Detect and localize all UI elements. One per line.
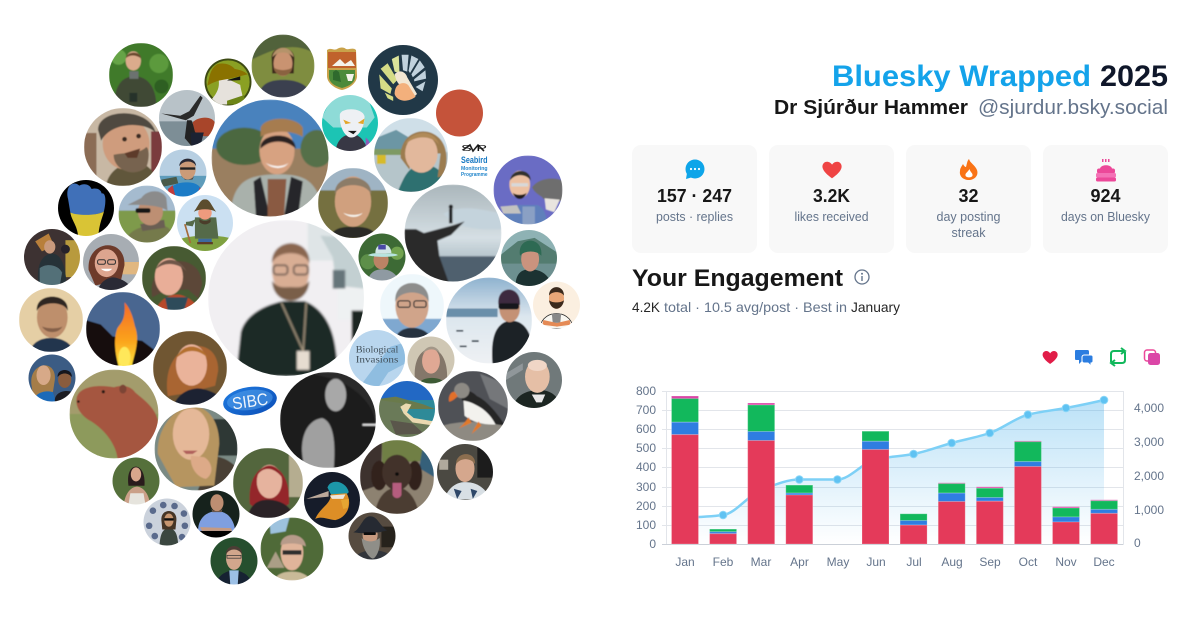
avatar: man in sunglasses on snowy shore: [446, 278, 532, 364]
avatar: woman with glasses and red hair: [83, 234, 139, 290]
avatar: Seabird Monitoring Programme logo: S P: [461, 144, 487, 153]
avatar: blonde woman finger to lip: [154, 406, 238, 490]
panel: days on Bluesky: [1043, 145, 1168, 253]
avatar: Seabird Monitoring Programme logo: Monitoring: [461, 166, 488, 172]
avatar: woman with long grey hair: [408, 336, 454, 384]
month labels: May: [827, 555, 849, 569]
avatar: SIBC logo: SIBC: [231, 390, 269, 413]
avatar: Biological Invasions journal: [349, 330, 405, 386]
icon: chat bubble: [686, 160, 704, 179]
month labels: Nov: [1055, 555, 1077, 569]
icon: replies: [1075, 350, 1093, 366]
bars: Apr: [786, 485, 813, 544]
avatar: person with mask and yellow wall: [24, 229, 80, 285]
avatar: shield logo: [327, 48, 357, 90]
panel: days on Bluesky: days on Bluesky: [1061, 209, 1150, 224]
avatar: woman against patterned wall: [144, 498, 190, 546]
panel: likes received: 3.2K: [813, 186, 850, 206]
cumulative line: [685, 400, 1104, 518]
avatar: woman in green beanie: [501, 230, 557, 286]
avatar: man with glasses: [380, 274, 444, 338]
avatar: man in beanie closeup: [84, 108, 162, 188]
bars: Feb: [710, 529, 737, 544]
avatar: capybara: [70, 370, 158, 458]
bars: Nov: [1052, 507, 1080, 544]
avatar: SIBC logo: [221, 383, 279, 419]
month labels: Feb: [713, 555, 734, 569]
engagement summary: [632, 299, 900, 315]
bars: Oct: [1014, 441, 1041, 544]
left axis labels: 0: [649, 537, 656, 551]
avatar: two friends selfie: [28, 354, 75, 402]
cumulative area: [685, 400, 1104, 544]
month labels: Jul: [906, 555, 922, 569]
avatar: man with blue jacket: [160, 150, 206, 196]
bars: Mar: [748, 403, 775, 544]
panel: day posting streak: 32: [958, 186, 978, 206]
left axis labels: 700: [636, 403, 656, 417]
avatar: man in green foliage: [109, 43, 173, 107]
avatar: man in blue shirt: [192, 490, 240, 538]
panel: day posting streak: streak: [952, 225, 986, 240]
avatar: bird of prey over sea: [159, 90, 215, 146]
right axis labels: [1134, 401, 1164, 550]
avatar: cartoon hiker: [177, 195, 233, 251]
avatar: teal anime character: [322, 95, 378, 151]
avatar: bonfire at dusk: [86, 292, 160, 367]
avatar: bearded man in wide hat: [348, 512, 396, 560]
chart legend icons: [1043, 348, 1160, 366]
avatar: smiling man with cap in landscape: [212, 100, 333, 219]
bars: Jun: [862, 431, 889, 544]
avatar: blonde woman by lake: [374, 118, 448, 196]
month labels: Mar: [751, 555, 771, 569]
avatar: Biological Invasions journal: Biological: [356, 345, 399, 355]
avatar: Ukraine fist: [58, 180, 114, 236]
avatar: bearded man outdoors: [252, 34, 314, 98]
gridlines: [662, 391, 1124, 544]
avatar: woman in cap: [358, 234, 406, 280]
profile name and handle: Dr Sjúrður Hammer: [774, 97, 968, 119]
bars: Jul: [900, 514, 927, 544]
month labels: Aug: [941, 555, 963, 569]
avatar: man in cap in forest: [260, 518, 324, 580]
left axis labels: 500: [636, 441, 656, 455]
stacked bars: [672, 396, 1118, 544]
month labels: Jun: [866, 555, 886, 569]
avatar: cartoon man with shark: [494, 156, 562, 224]
left axis labels: [636, 384, 656, 551]
avatar: dark bird logo: [368, 45, 438, 115]
bars: Sep: [976, 487, 1003, 544]
avatar: plain red-orange circle: [436, 90, 483, 136]
icon: info: [855, 270, 869, 284]
bars: Dec: [1091, 500, 1118, 544]
month labels: Apr: [790, 555, 809, 569]
title: Bluesky Wrapped: [832, 60, 1091, 93]
avatar: main profile portrait: [208, 220, 370, 376]
stat cards: [632, 145, 1168, 253]
panel: day posting streak: [906, 145, 1031, 253]
avatar: smiling man closeup: [318, 168, 388, 239]
avatar: brown spaniel dog: [360, 440, 434, 514]
panel: posts and replies: 157 · 247: [657, 186, 732, 206]
avatar: puffin on rock: [438, 371, 508, 441]
header: [774, 60, 1168, 119]
profile name and handle: @sjurdur.bsky.social: [978, 97, 1168, 119]
month labels: Sep: [979, 555, 1001, 569]
bars: Jan: [672, 396, 698, 544]
bars: Aug: [938, 483, 965, 544]
avatar: woman with brown hair and scarf: [142, 246, 206, 310]
panel: likes received: [769, 145, 894, 253]
heading: Your Engagement: Your Engagement: [632, 265, 843, 292]
avatar: black and white portrait: [280, 372, 376, 468]
avatar: man in suit: [210, 538, 258, 584]
avatar: Seabird Monitoring Programme logo: Seabird: [461, 155, 488, 165]
avatar: kingfisher painting: [304, 472, 360, 528]
engagement summary: total · 10.5 avg/post · Best in: [664, 299, 847, 315]
month labels: Oct: [1019, 555, 1038, 569]
left axis labels: 100: [636, 518, 656, 532]
panel: days on Bluesky: 924: [1090, 186, 1120, 206]
avatar: redhead selfie: [153, 331, 227, 405]
avatar: red haired woman: [233, 448, 303, 518]
panel: posts and replies: posts · replies: [656, 209, 733, 224]
right axis labels: 3,000: [1134, 435, 1164, 449]
left axis labels: 400: [636, 460, 656, 474]
left axis labels: 600: [636, 422, 656, 436]
icon: cake: [1096, 159, 1116, 182]
icon: likes: [1043, 351, 1058, 364]
avatar: woman with glasses and patterned shirt: [437, 444, 493, 500]
avatar: man in grey cap and sunglasses: [118, 186, 176, 245]
title: 2025: [1100, 60, 1168, 93]
panel: day posting streak: day posting: [936, 209, 1000, 224]
month labels: Dec: [1093, 555, 1115, 569]
engagement summary: January: [851, 299, 900, 315]
chart: engagement by month: [636, 384, 1164, 569]
line points: [719, 396, 1108, 519]
avatar: cartoon bearded scientist: [533, 282, 580, 328]
month labels: Jan: [675, 555, 695, 569]
panel: likes received: likes received: [794, 209, 868, 224]
right axis labels: 1,000: [1134, 503, 1164, 517]
icon: heart: [822, 162, 842, 178]
engagement summary: 4.2K: [632, 299, 661, 315]
profile name and handle: [774, 97, 1168, 119]
panel: posts and replies: [632, 145, 757, 253]
right axis labels: 2,000: [1134, 469, 1164, 483]
avatar: person on cliff over sea: [404, 184, 502, 285]
avatar: beach with turquoise bay: [379, 381, 435, 437]
icon: quotes: [1144, 350, 1160, 365]
avatar: cartoon hat logo: [204, 58, 252, 106]
avatar: Seabird Monitoring Programme logo: [461, 144, 488, 178]
left axis labels: 800: [636, 384, 656, 398]
avatar: Biological Invasions journal: Invasions: [356, 355, 399, 365]
icon: flame: [960, 159, 977, 180]
avatar: woman in dress on green: [112, 458, 160, 504]
icon: reposts: [1111, 348, 1125, 366]
avatar: bald man on wooden deck: [506, 352, 562, 408]
month labels: [675, 555, 1115, 569]
avatar: man with short hair on beige: [19, 288, 83, 352]
right axis labels: 0: [1134, 536, 1141, 550]
left axis labels: 200: [636, 499, 656, 513]
avatar cluster: [19, 34, 580, 584]
left axis labels: 300: [636, 480, 656, 494]
avatar: Seabird Monitoring Programme logo: Programme: [461, 172, 488, 178]
right axis labels: 4,000: [1134, 401, 1164, 415]
